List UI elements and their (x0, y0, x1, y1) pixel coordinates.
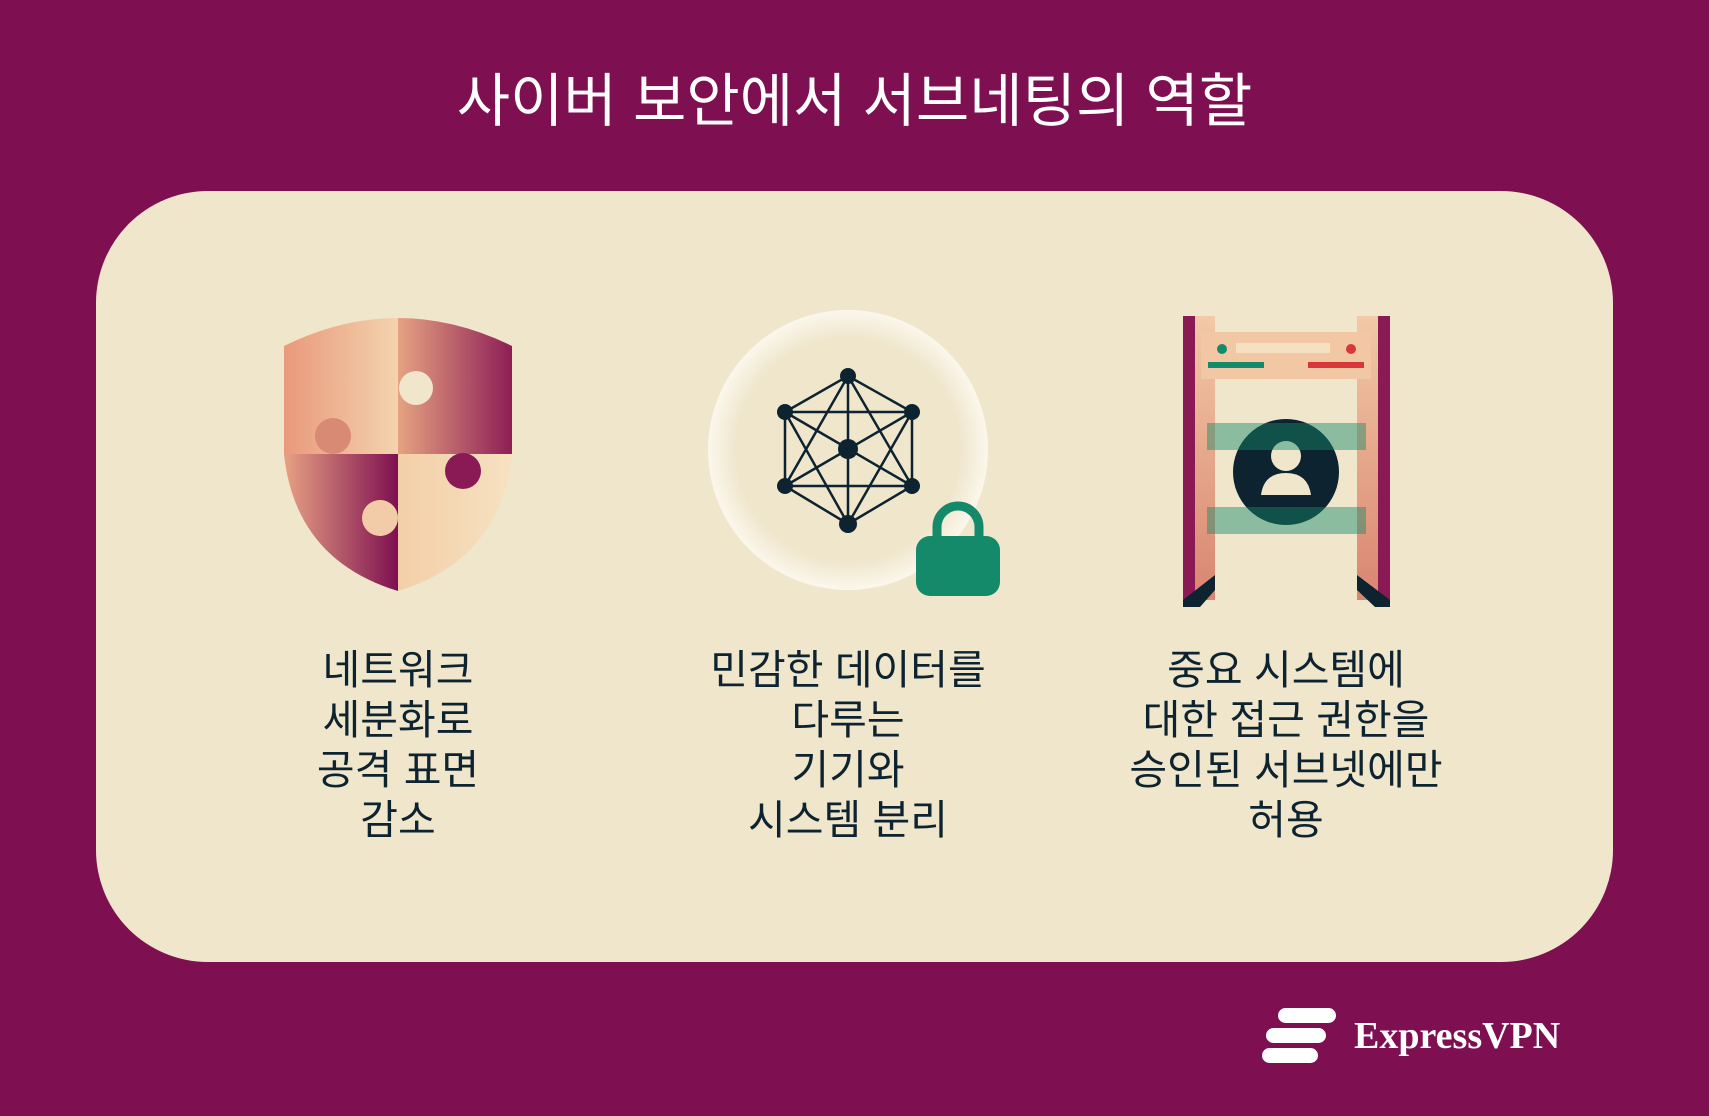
text: column 1: 감소 (360, 797, 436, 843)
text: column 2: 다루는 (791, 697, 905, 743)
text: column 1: 공격 표면 (317, 747, 479, 793)
logo: ExpressVPN (1262, 1008, 1560, 1063)
icon: network bubble (708, 310, 988, 590)
text: column 1: 네트워크 (323, 647, 473, 693)
text: column 2: 기기와 (791, 747, 905, 793)
logo: ExpressVPN: ExpressVPN (1354, 1015, 1560, 1057)
text: column 2: 시스템 분리 (748, 797, 948, 843)
title: 사이버 보안에서 서브네팅의 역할 (457, 69, 1252, 134)
icon: padlock (916, 506, 1000, 596)
text: column 2: 민감한 데이터를 (710, 647, 986, 693)
text: column 1: 세분화로 (323, 697, 473, 743)
text: column 3: 허용 (1248, 797, 1324, 843)
icon: security gate (1183, 316, 1390, 607)
panel: main card (96, 191, 1613, 962)
text: column 2 (710, 647, 986, 843)
text: column 3: 대한 접근 권한을 (1143, 697, 1429, 743)
text: column 1 (317, 647, 479, 843)
text: column 3: 중요 시스템에 (1167, 647, 1405, 693)
text: column 3 (1129, 647, 1443, 843)
icon: puzzle shield (284, 318, 512, 591)
icons svg (284, 310, 1390, 607)
text: column 3: 승인된 서브넷에만 (1129, 747, 1443, 793)
